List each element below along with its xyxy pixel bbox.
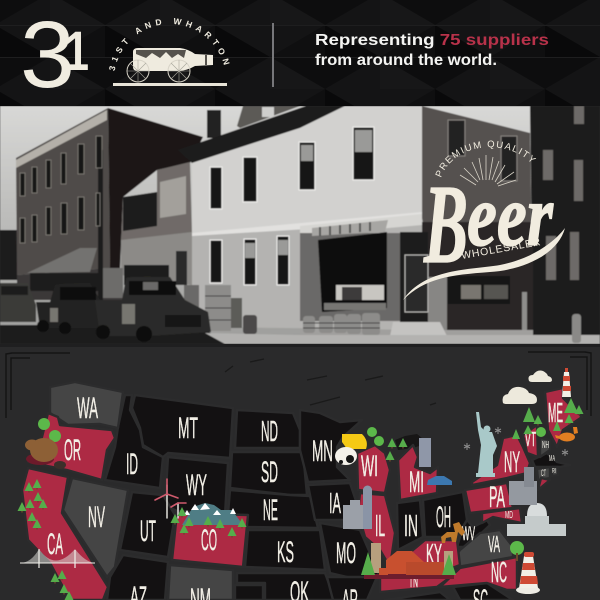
US map: [22, 382, 582, 600]
state labels: MI: [409, 466, 424, 499]
dark shadow of eastern lakes: [395, 434, 428, 450]
premium quality arc: PREMIUM QUALITY: [435, 140, 536, 178]
icon: north carolina lighthouse and tree: [510, 541, 540, 594]
beer script: B: [423, 163, 468, 287]
icon: golden gate bridge: [20, 549, 95, 568]
state labels: WV: [462, 524, 475, 545]
icon: oregon bear and trees: [25, 418, 66, 469]
state labels: SD: [261, 456, 278, 489]
trucks: [0, 283, 36, 322]
map panel background: [0, 344, 600, 600]
state labels: CT: [541, 468, 546, 478]
state labels: TN: [409, 572, 418, 591]
icon: snowflakes: [464, 427, 568, 456]
beer script: eer: [467, 168, 554, 265]
icon: michigan tower and car: [419, 438, 452, 485]
state labels: VA: [488, 531, 500, 557]
state labels: WA: [77, 392, 98, 425]
brick building windows: [20, 136, 102, 243]
icon: maine crab: [555, 427, 578, 442]
state labels: PA: [489, 481, 505, 514]
icon: northeast trees: [512, 398, 584, 439]
state labels: MA: [549, 454, 555, 463]
state labels: WY: [186, 469, 207, 502]
header band: [0, 0, 600, 108]
state labels: IL: [375, 508, 385, 543]
state labels: VT: [525, 429, 536, 451]
icon: wind turbines: [155, 479, 186, 518]
beer script: [423, 163, 554, 287]
headline: [315, 32, 549, 69]
state labels: ID: [126, 448, 138, 481]
icon: california trees: [18, 479, 74, 600]
white building windows: [210, 127, 374, 285]
state labels: KS: [277, 536, 294, 569]
state labels: WI: [361, 450, 378, 483]
state labels: MD: [505, 510, 513, 521]
state labels: ND: [261, 416, 278, 448]
headline: from around the world.: [315, 52, 497, 69]
states not served: grey: [50, 382, 558, 600]
logo: 31 numeral: 1: [65, 19, 89, 82]
state labels: CO: [201, 524, 217, 557]
icon: capitol building: [507, 503, 566, 536]
state labels: IA: [329, 488, 341, 520]
awning: [27, 248, 97, 273]
icon: colorado mountains and trees: [170, 503, 246, 538]
icon: wisconsin cheese and cow: [335, 427, 408, 465]
state labels: NV: [88, 501, 105, 534]
logo: bottle on wheels: [113, 48, 227, 86]
icon: pennsylvania skyline: [509, 467, 537, 505]
supplier states: red: [22, 388, 582, 600]
sunburst rays: [460, 155, 516, 186]
beer wholesaler logo: [403, 140, 565, 300]
state labels: NC: [491, 557, 507, 589]
icon: chicago skyline: [343, 486, 372, 529]
hydrant: [572, 314, 581, 343]
state labels: OR: [64, 434, 81, 467]
icon: statue of liberty: [476, 412, 497, 477]
text: ME: [548, 397, 563, 428]
states not served: black: [105, 395, 570, 600]
state labels: [47, 392, 563, 600]
state labels: NY: [504, 446, 520, 479]
corner and right building windows: [448, 120, 517, 181]
state labels: MN: [312, 435, 333, 468]
barrels: [184, 285, 380, 335]
state labels: NE: [263, 494, 278, 527]
icon: kentucky horse: [441, 522, 465, 543]
icon: farm with barn and silos: [361, 543, 456, 579]
swash: [403, 228, 565, 300]
state labels: IN: [404, 508, 418, 543]
state labels: KY: [426, 538, 442, 569]
photo: historic building and trucks: [0, 106, 600, 344]
headline: Representing 75 suppliers: [315, 32, 549, 49]
state labels: RI: [552, 468, 556, 475]
street: [0, 325, 225, 344]
header divider: [272, 23, 274, 87]
icon: maine lighthouse: [562, 368, 571, 397]
state labels: CA: [47, 528, 63, 561]
state labels: MT: [178, 412, 198, 445]
wholesaler: WHOLESALER: [460, 236, 542, 262]
state labels: MO: [336, 537, 356, 570]
state labels: UT: [140, 515, 156, 548]
state labels: NH: [542, 440, 549, 451]
logo: arched brand name: 31ST AND WHARTON: [109, 18, 230, 71]
state labels: OH: [436, 501, 451, 534]
logo: 31 numeral: 3: [20, 2, 75, 108]
icon: clouds: [503, 370, 552, 404]
